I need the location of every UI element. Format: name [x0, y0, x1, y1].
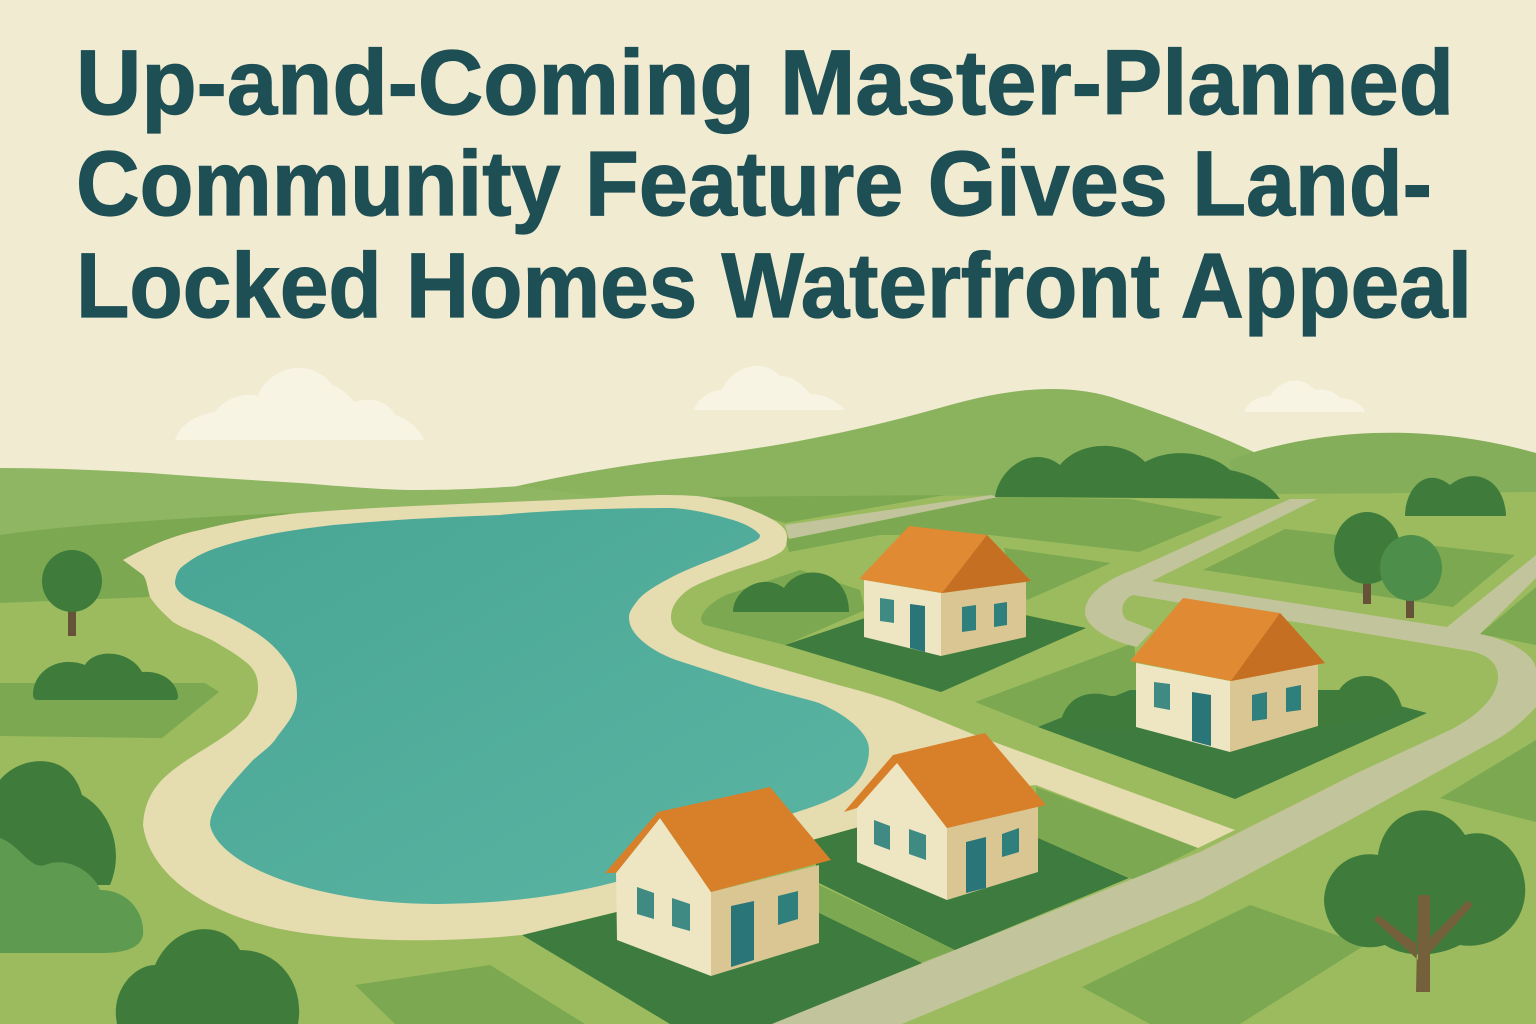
ground [0, 492, 1536, 1024]
bush: by first house [733, 573, 849, 612]
clouds [175, 366, 1365, 440]
fields [0, 495, 1536, 1024]
lake shore [123, 495, 1235, 940]
title: Up-and-Coming Master-Planned [76, 32, 1454, 134]
house 4 [605, 787, 831, 976]
bushes and trees [0, 446, 1525, 1024]
bush: lower left dark [0, 761, 116, 885]
title: Locked Homes Waterfront Appeal [76, 235, 1472, 337]
far hills [500, 389, 1536, 560]
trees: right pair [1334, 512, 1442, 618]
house 2 [1130, 598, 1325, 752]
bush: bottom [116, 929, 299, 1024]
house 1 [859, 526, 1031, 656]
tree: left [42, 550, 102, 636]
tree: lower right [1324, 810, 1525, 992]
lake water [175, 508, 869, 904]
title [76, 32, 1472, 337]
bush: behind house 2 right [1310, 676, 1403, 730]
title: Community Feature Gives Land- [76, 133, 1432, 235]
bush: behind house 2 left [1050, 694, 1140, 730]
bush: left [33, 654, 178, 700]
roads [772, 495, 1536, 1024]
bushes: horizon [995, 446, 1280, 499]
home lots [522, 615, 1427, 1024]
house 3 [844, 733, 1046, 900]
bush: lower left light [0, 838, 143, 953]
left hill [0, 468, 620, 620]
